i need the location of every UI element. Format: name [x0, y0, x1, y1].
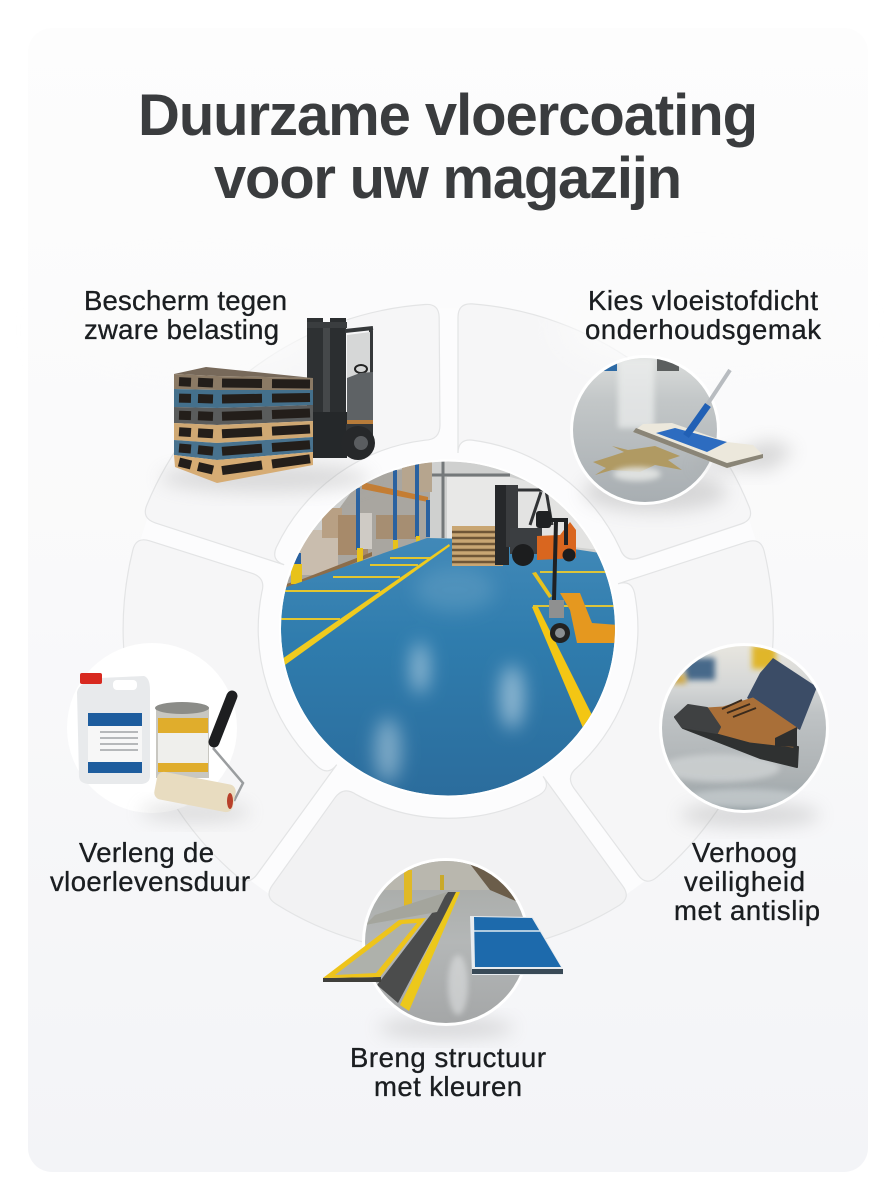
- mast fill: [323, 328, 330, 418]
- upper stock: [402, 462, 432, 492]
- rear wheel: [562, 548, 576, 562]
- label: breng: [350, 1042, 546, 1102]
- plate: [656, 428, 727, 452]
- white circle ring: [570, 355, 720, 505]
- wall dark mark: [657, 357, 679, 371]
- shelving right: [470, 864, 525, 905]
- segment: top left: [142, 240, 475, 598]
- label top: [88, 713, 142, 726]
- panel surface: [474, 917, 561, 967]
- shadow: [140, 802, 250, 822]
- heel patch: [775, 727, 797, 747]
- pallet jack: [548, 520, 618, 643]
- orange strip: [346, 420, 373, 424]
- white gaps between segments: [144, 308, 752, 887]
- end cap: [227, 793, 233, 809]
- reflection right: [500, 665, 524, 729]
- background yellow blur left: [672, 674, 686, 684]
- orange rack beam: [362, 482, 428, 502]
- pallet layer 1: [174, 374, 313, 390]
- jug: [77, 673, 150, 784]
- bollards: [291, 536, 420, 584]
- small yellow column: [440, 875, 444, 890]
- item: forklift and pallets: [160, 318, 375, 492]
- wall blue mark: [603, 362, 617, 371]
- jug handle hole: [113, 680, 137, 690]
- haze left: [60, 285, 320, 375]
- right horizontal lines: [533, 572, 616, 606]
- floor: [660, 645, 830, 815]
- segment: bottom: [244, 691, 631, 1069]
- floor image: [360, 855, 535, 1030]
- reflection top: [415, 568, 495, 612]
- handle: [548, 520, 566, 600]
- main diagonal line: [282, 544, 450, 665]
- bollard 1: [291, 564, 302, 584]
- shadow: [583, 472, 727, 512]
- line 1: Verhoog: [692, 837, 797, 868]
- anti-slip grit: [660, 754, 780, 782]
- yellow column: [404, 870, 412, 913]
- label: [88, 713, 142, 773]
- floor image: [570, 355, 720, 505]
- blue floor: [278, 538, 620, 800]
- label: verleng: [50, 837, 250, 897]
- roller door: [447, 477, 510, 539]
- pallet base: [286, 552, 372, 590]
- pallet openings: [179, 382, 310, 471]
- white ring: [362, 858, 530, 1026]
- wire: [213, 748, 243, 801]
- line 1: Breng structuur: [350, 1042, 546, 1073]
- white divider: [474, 930, 540, 932]
- can body: [156, 707, 209, 778]
- pallet layer 2: [174, 389, 313, 408]
- back wall: [360, 860, 535, 890]
- racking background: [286, 469, 430, 588]
- right line upper: [532, 572, 552, 598]
- line 2: zware belasting: [84, 314, 279, 345]
- yellow panel: [323, 918, 426, 982]
- yellow band top: [158, 718, 208, 733]
- boot leather: [707, 698, 797, 747]
- wheel: [341, 426, 375, 460]
- mast second: [506, 485, 518, 547]
- label: bescherm: [84, 285, 287, 345]
- forklift: [495, 485, 576, 566]
- line 2: onderhoudsgemak: [585, 314, 821, 345]
- spill: [593, 446, 682, 475]
- segment: left: [12, 507, 399, 885]
- gap upper left: [144, 530, 267, 570]
- seat: [536, 511, 551, 528]
- wheel hub: [555, 628, 565, 638]
- laces: [722, 700, 756, 717]
- line 2: veiligheid: [684, 866, 805, 897]
- panel edge: [472, 969, 563, 974]
- shadow: [680, 803, 820, 827]
- boot sole: [675, 717, 798, 767]
- paint can: [155, 702, 209, 778]
- panel base: [470, 916, 563, 975]
- mast cross: [307, 322, 347, 328]
- steering wheel: [355, 365, 367, 373]
- right wall: [510, 477, 600, 550]
- floor: [360, 855, 535, 1030]
- grit lower: [685, 789, 805, 807]
- title line 2: voor uw magazijn: [214, 146, 682, 211]
- cab opening: [347, 332, 370, 378]
- label: kies: [585, 285, 821, 345]
- mast: [495, 485, 509, 565]
- pallet layer 4: [174, 421, 313, 443]
- lower body: [346, 424, 373, 438]
- cab frame: [518, 490, 552, 525]
- box upper: [322, 508, 342, 538]
- pallets: [452, 526, 503, 566]
- floor highlights: [618, 358, 654, 428]
- box pale 2: [360, 513, 372, 549]
- bollard 2: [357, 548, 363, 563]
- gap lower right: [560, 782, 636, 887]
- panel edge: [323, 977, 381, 982]
- pump: [549, 600, 564, 618]
- label bottom: [88, 762, 142, 773]
- item: safety boot: [659, 643, 830, 827]
- forklift: [307, 318, 375, 460]
- gap upper right: [629, 530, 752, 570]
- white ring: [659, 643, 829, 813]
- handle blue: [686, 405, 708, 436]
- front wheel: [512, 544, 534, 566]
- line 1: Bescherm tegen: [84, 285, 287, 316]
- label: verhoog: [674, 837, 820, 926]
- bollard 3: [393, 540, 398, 550]
- orange body: [560, 593, 618, 643]
- mast right: [330, 318, 346, 433]
- carriage: [313, 412, 347, 458]
- background yellow blur: [752, 645, 776, 669]
- line 2: met kleuren: [374, 1071, 522, 1102]
- pad: [633, 423, 763, 468]
- overhead guard: [345, 328, 373, 375]
- box brown: [338, 515, 368, 555]
- left floor frame back: [365, 892, 447, 925]
- label: [158, 733, 208, 763]
- pallet stack: [174, 367, 313, 483]
- segment: top right: [458, 304, 751, 559]
- sleeve: [153, 771, 237, 813]
- parking lines: [280, 558, 430, 619]
- can top: [155, 702, 209, 714]
- line 2: vloerlevensduur: [50, 866, 250, 897]
- mast left: [307, 318, 323, 418]
- pad fringe: [633, 428, 763, 468]
- line 3: met antislip: [674, 895, 820, 926]
- gap top: [437, 308, 459, 438]
- back wall: [289, 462, 604, 578]
- shadow: [378, 1018, 514, 1038]
- panel surface: [335, 923, 417, 975]
- handle pole: [705, 370, 730, 408]
- paint roller: [153, 696, 243, 813]
- yellow band bottom: [158, 763, 208, 772]
- dark strip: [377, 892, 457, 1003]
- blue post left: [293, 553, 301, 565]
- wheel: [550, 623, 570, 643]
- mop: [633, 370, 795, 470]
- slats: [452, 532, 503, 562]
- white ring around center image: [280, 460, 616, 796]
- body: [347, 372, 373, 421]
- cab body: [510, 528, 542, 554]
- boxes: [286, 462, 432, 590]
- line 1: Kies vloeistofdicht: [588, 285, 818, 316]
- floor: [570, 355, 720, 505]
- haze right: [560, 280, 840, 370]
- white circle: [67, 643, 237, 813]
- pallet layer 3: [174, 405, 313, 425]
- wall beams: [428, 460, 510, 538]
- item: mop on spill: [570, 355, 795, 512]
- pallet layer 6: [174, 452, 313, 483]
- right thick line: [532, 605, 592, 728]
- trouser: [747, 658, 817, 730]
- pallet layer 5: [174, 437, 313, 460]
- jug body: [77, 676, 150, 784]
- box stack pale: [296, 530, 338, 575]
- handle: [214, 696, 232, 742]
- title line 1: Duurzame vloercoating: [138, 83, 758, 148]
- item: coating products: [67, 643, 250, 822]
- floor reflections: [375, 568, 524, 782]
- segmented ring: [12, 240, 850, 1069]
- yellow floor lines: [280, 544, 616, 728]
- rack posts: [358, 463, 428, 550]
- item: colour zones: [323, 855, 563, 1038]
- white haze behind top labels: [60, 280, 840, 375]
- reflection low: [375, 718, 401, 782]
- label text lines: [100, 732, 138, 750]
- background blue blur: [685, 658, 715, 680]
- gap lower left: [260, 782, 336, 887]
- line 1: Verleng de: [79, 837, 214, 868]
- ground shadow: [160, 464, 370, 492]
- segment: right: [517, 538, 850, 895]
- orange body: [537, 522, 576, 560]
- toe cap: [675, 705, 720, 733]
- yellow guide line: [400, 892, 460, 1011]
- pallet back top: [174, 367, 313, 378]
- boot image: [660, 645, 830, 815]
- hub: [354, 436, 368, 450]
- bollard 4: [416, 536, 420, 542]
- jug cap: [80, 673, 102, 684]
- panel frame: [323, 918, 426, 978]
- mop shadow: [690, 440, 795, 470]
- center image: warehouse floor: [278, 460, 620, 800]
- reflection left: [411, 642, 429, 694]
- pallet stack: [452, 526, 503, 566]
- title: [138, 83, 758, 211]
- blue panel: [470, 916, 563, 975]
- ring base glow: [252, 432, 644, 824]
- box back: [376, 515, 416, 539]
- spill highlight: [613, 467, 661, 481]
- floor light: [448, 955, 468, 1015]
